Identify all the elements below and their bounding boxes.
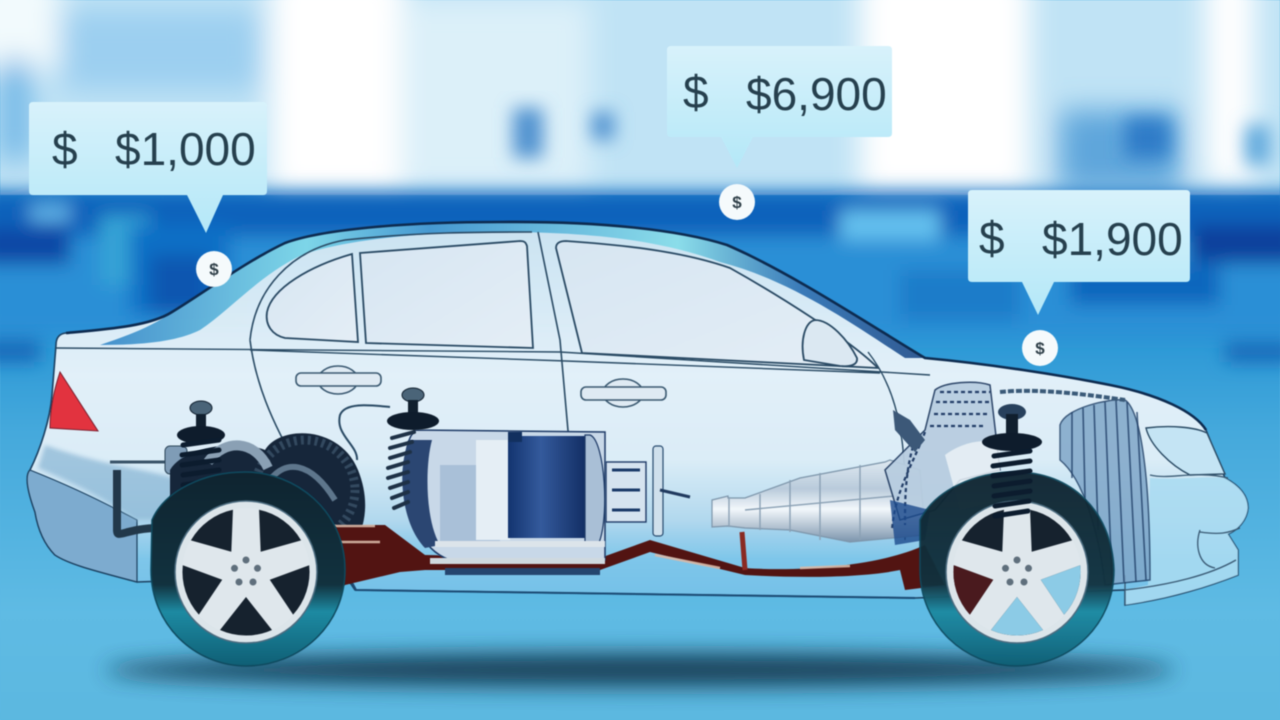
engine block (885, 382, 1000, 545)
headlight (1146, 427, 1225, 475)
rear coil spring strut (177, 401, 225, 505)
front window (556, 241, 878, 368)
car body (27, 222, 1248, 605)
front door outline (868, 352, 905, 540)
radiator (1000, 391, 1150, 585)
front coil spring strut (982, 404, 1042, 516)
rear door arch outline (250, 232, 575, 510)
motor coupling assembly (606, 446, 690, 536)
body shell (27, 222, 1248, 605)
rear quarter window (267, 254, 358, 342)
marker: rear coin: $ (209, 260, 219, 279)
marker: middle coin (719, 184, 755, 220)
rear lower panel tone (38, 445, 180, 520)
sill line (348, 575, 915, 598)
callout: rear component cost $1,000: $ (52, 123, 78, 175)
rear door handle (296, 366, 381, 394)
transmission (712, 460, 925, 542)
front door handle (581, 379, 666, 407)
front bumper tone (1125, 477, 1248, 605)
rear bumper tone (27, 470, 137, 582)
side mirror (803, 320, 857, 366)
spare wheel and rear well (170, 405, 390, 545)
marker: front coin (1022, 330, 1058, 366)
middle coil spring strut (387, 388, 439, 508)
callout: rear component cost $1,000 (29, 102, 267, 233)
callout: middle component cost $6,900: $6,900 (746, 68, 887, 120)
tail light (50, 372, 98, 431)
electric motor (402, 430, 605, 575)
front wheel lower-right hole showing background (1033, 555, 1085, 616)
front bumper details (1125, 475, 1240, 605)
callout: rear component cost $1,000: $1,000 (115, 123, 256, 175)
callout: front component cost $1,900: $1,900 (1042, 213, 1183, 265)
marker: front coin: $ (1035, 339, 1045, 358)
exhaust pipe bracket (110, 446, 187, 534)
front wheel bottom hole showing background (991, 597, 1043, 636)
front wheel (920, 472, 1114, 666)
rear wheel (151, 472, 345, 666)
marker: middle coin: $ (732, 193, 742, 212)
callout: middle component cost $6,900 (667, 46, 892, 168)
roof band (100, 222, 925, 358)
front wheel lower-left hole showing red chassis (949, 555, 1001, 616)
callout: front component cost $1,900: $ (979, 212, 1005, 264)
roof outline (66, 222, 1206, 430)
callout: middle component cost $6,900: $ (683, 66, 709, 118)
rear door window (360, 241, 533, 348)
body belt line (56, 348, 930, 375)
marker: rear coin (196, 251, 232, 287)
red chassis rails (325, 525, 945, 590)
ground shadow (105, 653, 1175, 687)
callout: front component cost $1,900 (968, 190, 1190, 315)
